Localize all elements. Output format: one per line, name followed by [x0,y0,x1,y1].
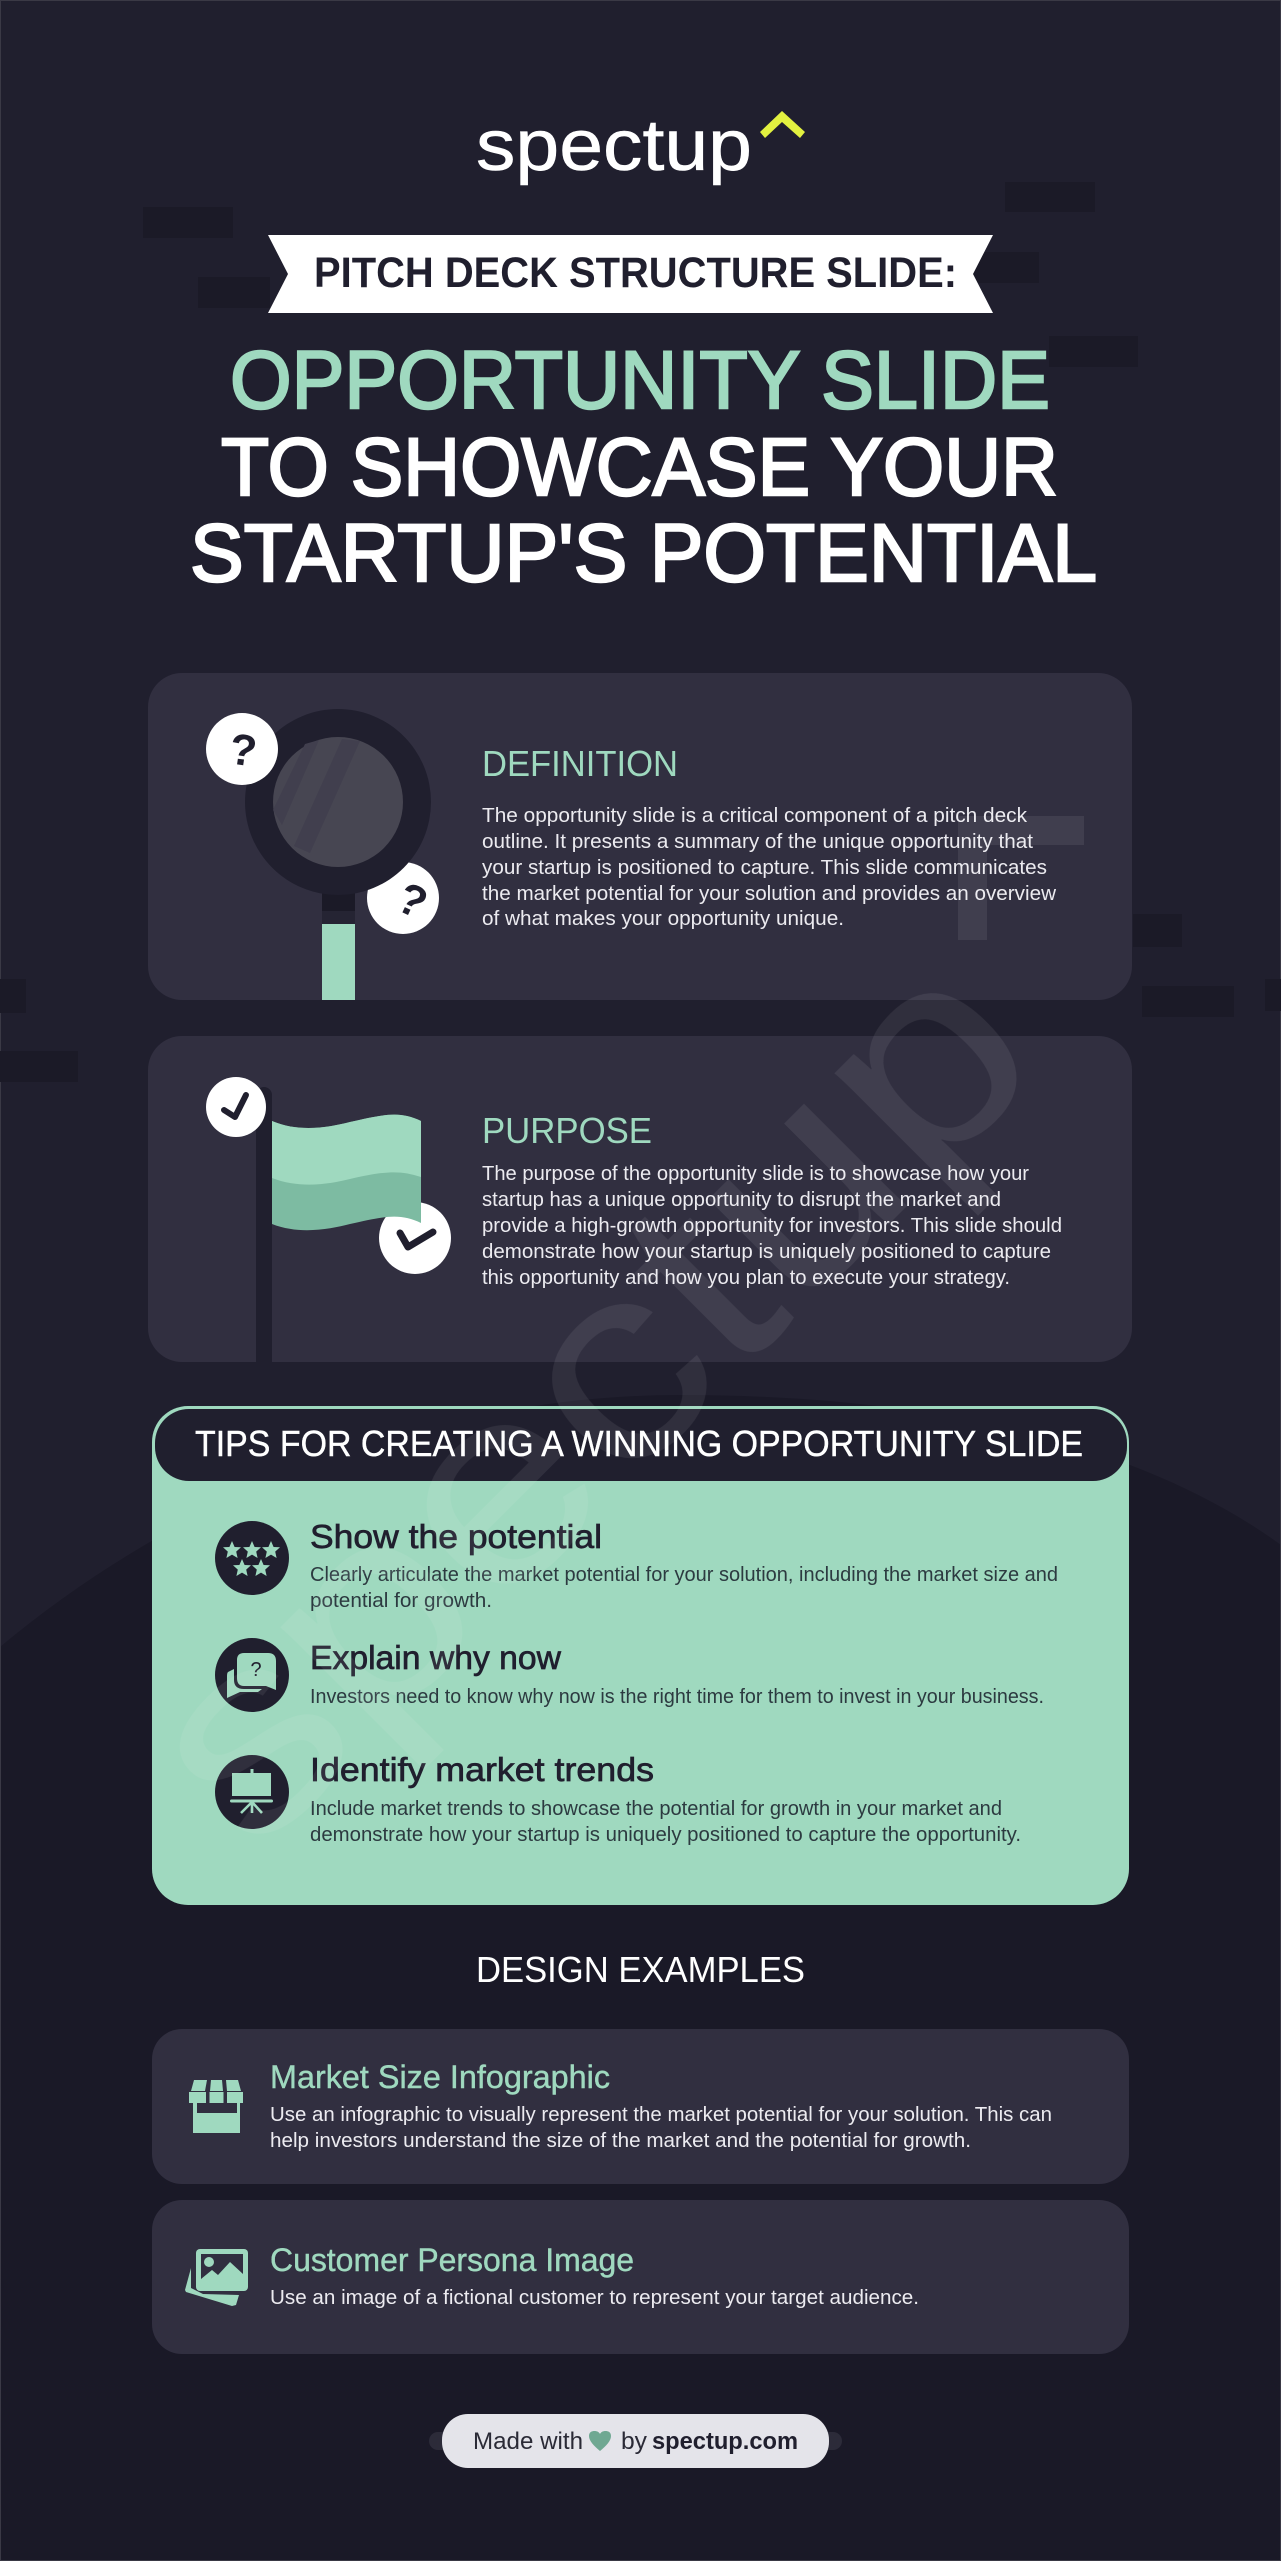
tip: show the potential: Clearly articulate the market potential for your solution, including the market size and [310,1564,1058,1586]
text block: purpose body: this opportunity and how you plan to execute your strategy. [482,1266,1010,1289]
text block: purpose body: The purpose of the opportunity slide is to showcase how your [482,1162,1029,1185]
icon: five stars [215,1521,289,1595]
icon: chat bubbles: ? [250,1659,262,1681]
heading: design examples: DESIGN EXAMPLES [476,1949,805,1990]
heading: tips [155,1409,1127,1481]
watermark: spectup: spectup [80,889,1091,1901]
text block: definition body: The opportunity slide is a critical component of a pitch deck [482,804,1028,827]
panel: market size infographic [152,2029,1129,2184]
panel: purpose [148,1036,1132,1362]
tip: show the potential [215,1518,1058,1612]
panel: market size infographic: Market Size Infographic [270,2059,610,2095]
text block: purpose body: demonstrate how your startup is uniquely positioned to capture [482,1240,1051,1263]
tip: identify market trends: Include market trends to showcase the potential for growth in your market and [310,1798,1002,1820]
panel: tips [152,1406,1129,1905]
icon: heart [589,2431,611,2451]
tip: explain why now: Investors need to know why now is the right time for them to invest in your business. [310,1686,1044,1708]
tip: identify market trends: demonstrate how your startup is uniquely positioned to capture the opportunity. [310,1824,1021,1846]
tip: show the potential: Show the potential [310,1518,602,1555]
tip: explain why now [215,1638,1044,1712]
tip: explain why now: Explain why now [310,1639,561,1676]
text block: definition body [482,804,1056,930]
heading: tips: TIPS FOR CREATING A WINNING OPPORTUNITY SLIDE [195,1423,1083,1464]
text block: definition body: of what makes your opportunity unique. [482,907,844,930]
title: OPPORTUNITY SLIDE [230,335,1050,426]
text block: definition body: outline. It presents a summary of the unique opportunity that [482,830,1033,853]
title: TO SHOWCASE YOUR [221,422,1058,513]
panel: customer persona image [152,2200,1129,2354]
icon: magnifying glass with question marks: ? [226,725,260,777]
footer: made with love badge [429,2414,842,2468]
icon: presentation easel [215,1755,289,1829]
text block: purpose body: startup has a unique opportunity to disrupt the market and [482,1188,1001,1211]
panel: customer persona image: Use an image of a fictional customer to represent your target audience. [270,2287,919,2309]
icon: chat bubbles [215,1638,289,1712]
heading: purpose: PURPOSE [482,1110,652,1151]
tip: identify market trends: Identify market trends [310,1751,654,1788]
panel: customer persona image: Customer Persona Image [270,2242,634,2278]
title: STARTUP'S POTENTIAL [190,508,1097,599]
icon: flag with check marks [206,1077,451,1362]
panel: definition [148,673,1132,1000]
banner: pitch deck structure slide [268,235,993,313]
text block: definition body: the market potential for your solution and provides an overview [482,882,1056,905]
panel: market size infographic: help investors understand the size of the market and the potential for growth. [270,2130,971,2152]
tip: identify market trends [215,1751,1021,1846]
text block: definition body: your startup is positioned to capture. This slide communicates [482,856,1047,879]
tip: show the potential: potential for growth. [310,1590,492,1612]
icon: magnifying glass with question marks: ? [390,873,435,929]
icon: image stack [185,2249,248,2306]
footer: made with love badge: by [621,2428,647,2455]
title [190,335,1097,599]
panel: market size infographic: Use an infographic to visually represent the market potential for your solution. This can [270,2104,1052,2126]
icon: magnifying glass with question marks [206,709,439,1000]
footer: made with love badge: spectup.com [652,2428,798,2455]
heading: definition: DEFINITION [482,743,678,784]
text block: purpose body [482,1162,1062,1289]
logo: spectup: spectup [476,106,752,186]
footer: made with love badge: Made with [473,2428,583,2455]
text block: purpose body: provide a high-growth opportunity for investors. This slide should [482,1214,1062,1237]
icon: storefront [189,2080,243,2133]
banner: pitch deck structure slide: PITCH DECK STRUCTURE SLIDE: [314,249,957,297]
